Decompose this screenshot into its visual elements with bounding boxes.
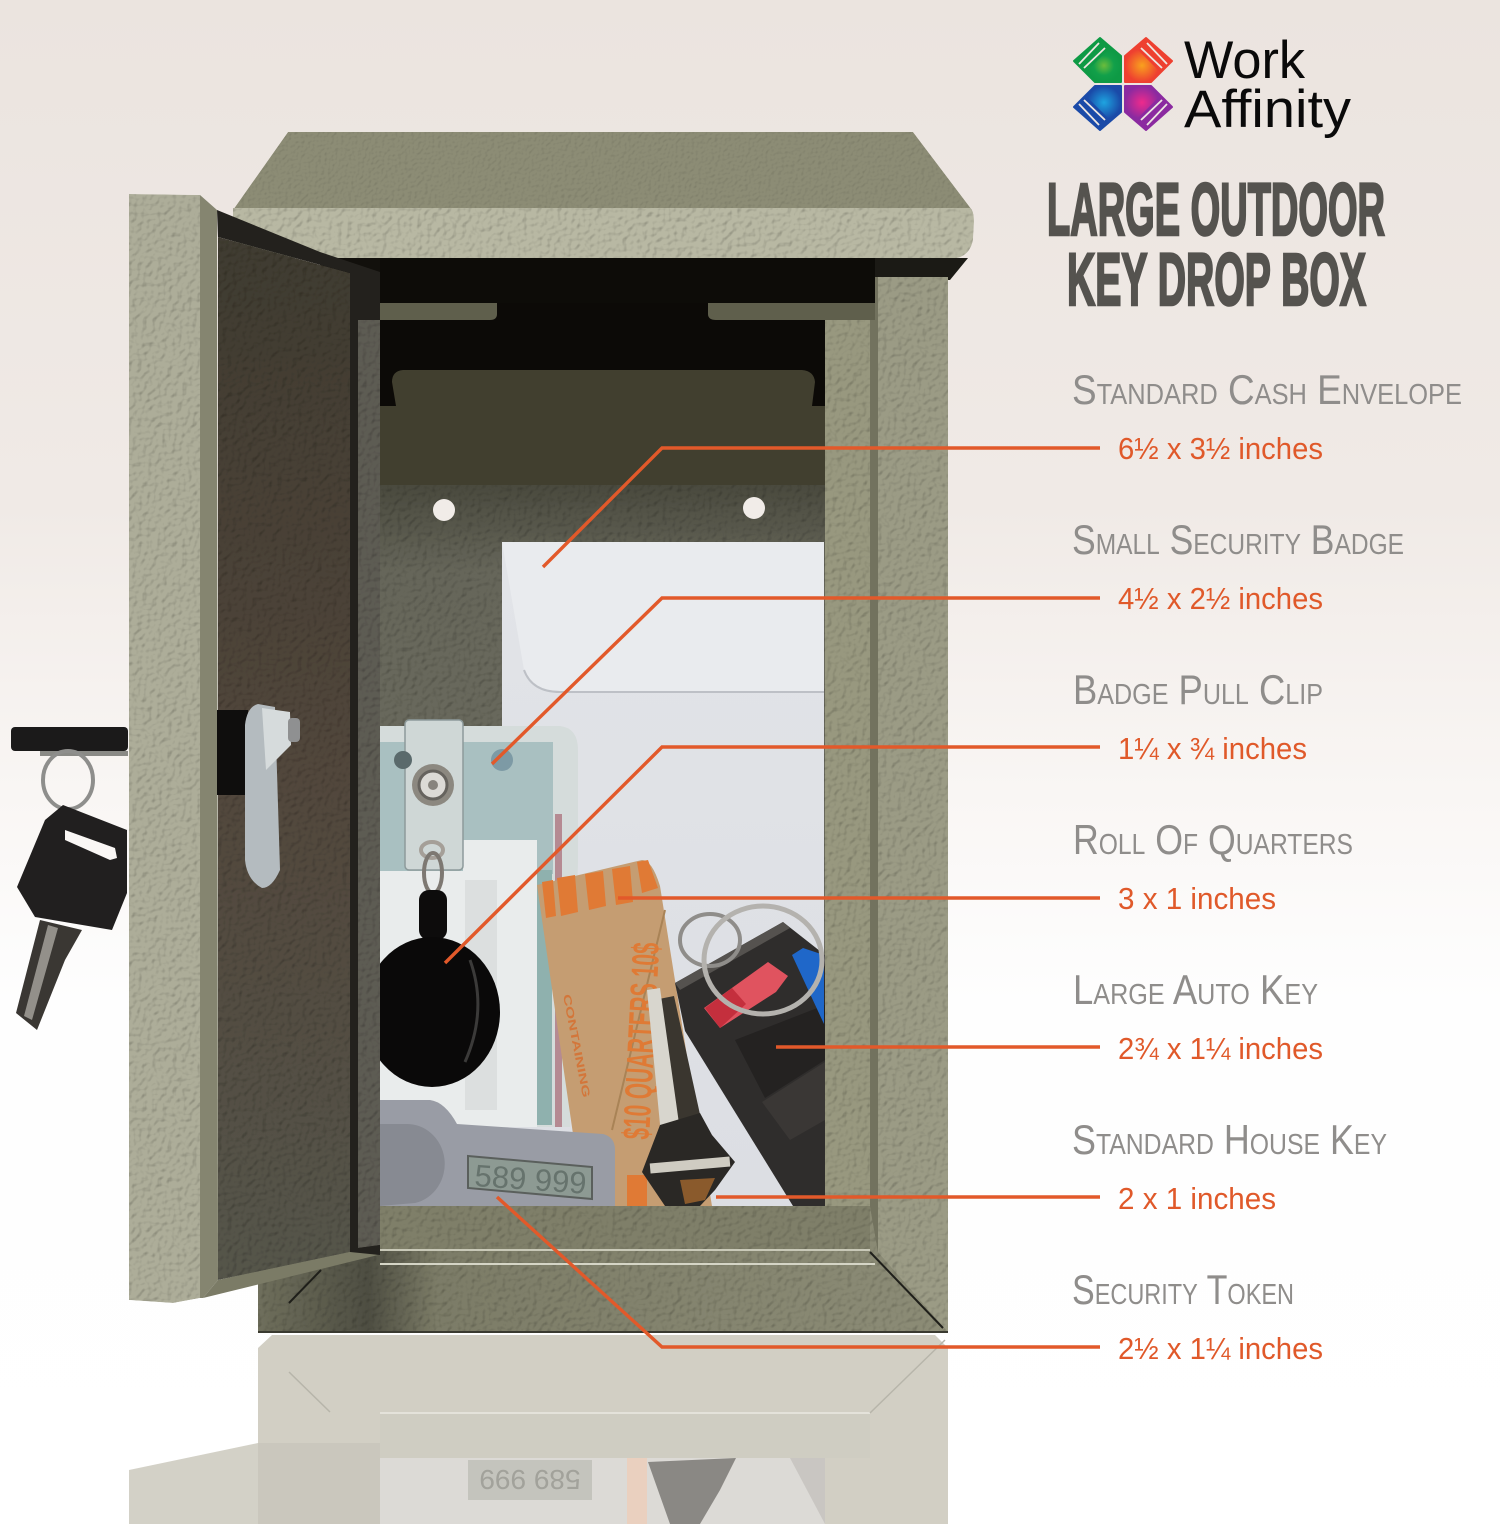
- callout: security token: [497, 1197, 1323, 1366]
- callout: large auto key: 2¾ x 1¼ inches: [1118, 1031, 1323, 1066]
- logo wordmark: Affinity: [1184, 80, 1352, 139]
- hanging keys: [11, 727, 128, 1030]
- door lock: [217, 704, 300, 888]
- logo wordmark: Work: [1184, 31, 1305, 90]
- callout: small security badge: Small Security Badge: [1072, 516, 1404, 563]
- callout: roll of quarters: Roll Of Quarters: [1073, 816, 1353, 863]
- door bottom flange: [203, 1250, 378, 1298]
- black key: [17, 805, 127, 930]
- car key fob: [675, 906, 825, 1206]
- key rings: [680, 914, 740, 966]
- door outer edge: [129, 194, 200, 1303]
- badge holder: [380, 720, 578, 1127]
- reflection of box: 589 999: [479, 1464, 581, 1495]
- blue tag: [792, 948, 824, 1024]
- callout: badge pull clip: [445, 666, 1323, 963]
- deposit flap: [380, 370, 825, 485]
- reflection of box: [129, 1335, 948, 1524]
- callout: large auto key: Large Auto Key: [1073, 966, 1318, 1013]
- callout: standard house key: 2 x 1 inches: [1118, 1181, 1276, 1216]
- callout: badge pull clip: 1¼ x ¾ inches: [1118, 731, 1307, 766]
- snap button: [412, 764, 454, 806]
- callout: standard cash envelope: [543, 366, 1462, 567]
- retractable badge reel: [380, 840, 500, 1087]
- callout: small security badge: [492, 516, 1404, 764]
- envelope: [502, 542, 824, 1206]
- callout: roll of quarters: [618, 816, 1353, 916]
- logo: WorkAffinity: [1074, 31, 1352, 139]
- callout: small security badge: 4½ x 2½ inches: [1118, 581, 1323, 616]
- key head in lock: [11, 727, 128, 751]
- roll of quarters: CONTAINING: [560, 993, 592, 1099]
- callout: standard cash envelope: 6½ x 3½ inches: [1118, 431, 1323, 466]
- house key: [642, 988, 735, 1206]
- panel: key drop box: [129, 132, 974, 1332]
- logo mark: [1074, 38, 1172, 130]
- roll printed text: $10 QUARTERS 10$: [616, 942, 668, 1140]
- callout: security token: Security Token: [1072, 1266, 1294, 1313]
- dark upper cavity: [380, 258, 825, 485]
- callout: security token: 2½ x 1¼ inches: [1118, 1331, 1323, 1366]
- roof: [233, 132, 974, 320]
- key ring: [43, 751, 93, 809]
- callout: roll of quarters: 3 x 1 inches: [1118, 881, 1276, 916]
- open door: [129, 194, 380, 1303]
- door inner face: [218, 237, 350, 1280]
- token display digits: 589 999: [474, 1158, 588, 1201]
- callout: badge pull clip: Badge Pull Clip: [1073, 666, 1323, 713]
- interior back wall: [380, 258, 825, 1206]
- callout: standard house key: Standard House Key: [1072, 1116, 1387, 1163]
- callout: large auto key: [776, 966, 1323, 1066]
- door inner rim: [217, 210, 380, 1255]
- bottom frame: [258, 1206, 948, 1332]
- box right frame: [825, 258, 968, 1332]
- security token: [380, 1100, 615, 1206]
- callout: standard house key: [716, 1116, 1387, 1216]
- roll of quarters: [537, 860, 712, 1206]
